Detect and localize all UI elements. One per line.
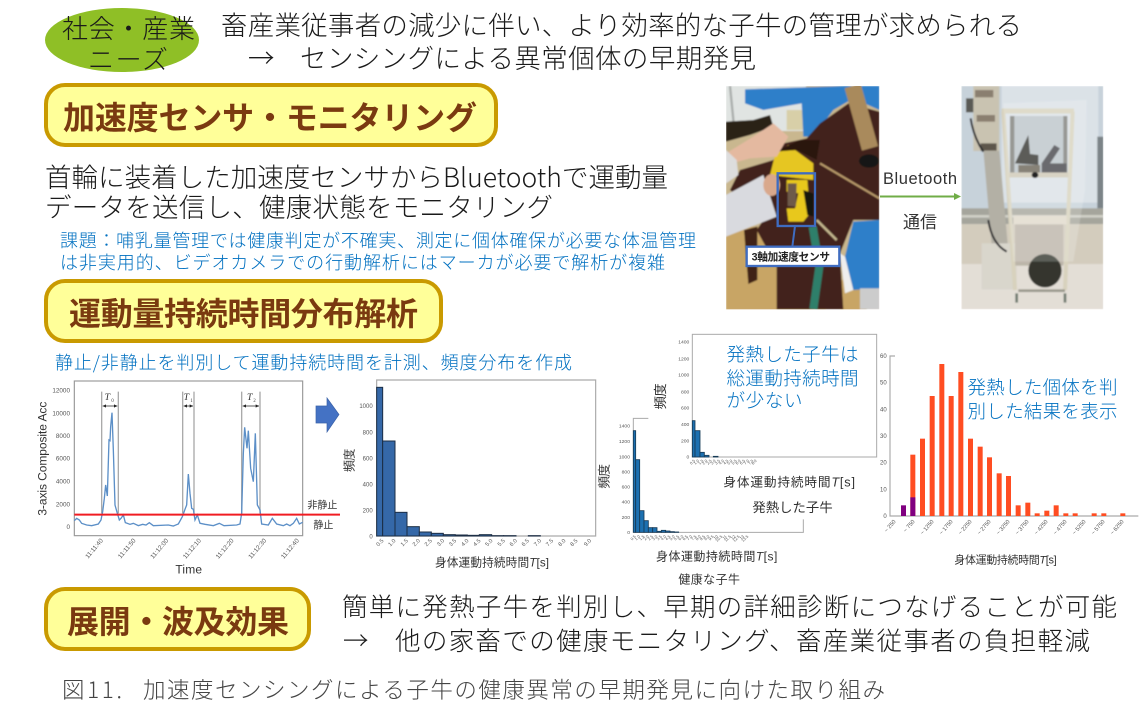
y axis ticks: 8000 [56,433,70,440]
duration markers T0 T1 T2 [102,392,260,513]
x axis ticks [84,537,301,560]
x axis ticks: ~ 250 [884,519,898,534]
y axis ticks: 200 [622,515,630,521]
x axis ticks: 5.5 [730,458,738,466]
y axis ticks: 1000 [359,404,373,410]
text block: issues [60,227,696,275]
heading: expected impact [46,589,309,649]
y axis ticks: 50 [880,381,887,387]
x axis ticks: 1.5 [697,458,705,466]
x axis ticks: 8.0 [558,538,567,548]
x axis ticks: 13.5 [740,533,750,543]
x axis ticks: 3.0 [709,458,717,466]
y axis ticks: 10 [880,487,887,493]
x axis ticks: 13 [738,533,746,541]
x axis ticks [689,458,758,466]
x axis ticks: 6.0 [677,533,685,541]
chart: feverish calf histogram [653,334,877,515]
y axis ticks: 600 [681,406,690,412]
x axis label: Time [175,563,202,577]
callout: feverish calves have low total duration [726,341,858,413]
x axis ticks: 11:12:00 [149,537,171,560]
text block: impact description [342,587,1117,658]
y axis label: 頻度 [343,449,357,472]
duration markers T0 T1 T2: 2 [253,399,256,404]
photo: receiver on stand [961,86,1103,309]
chart: discrimination result histogram [880,354,1138,567]
y axis ticks: 60 [880,354,887,360]
y axis ticks [678,340,690,461]
text block: impact description: 簡単に発熱子牛を判別し、早期の詳細診断につなげることが可能 [342,587,1117,624]
panel: social and industry needs [45,4,1022,77]
x axis label: 身体運動持続時間T[s] [656,549,777,564]
y axis ticks: 800 [622,469,630,475]
x axis ticks: 12.5 [732,533,741,543]
y axis ticks: 0 [66,524,70,531]
badge label: ニーズ [88,40,168,77]
y axis ticks: 1400 [619,424,630,430]
histogram bars [377,387,540,536]
callout: feverish calves have low total duration: が少ない [726,387,802,413]
x axis ticks: 2.5 [647,533,655,541]
text block: issues: 課題：哺乳量管理では健康判定が不確実、測定に個体確保が必要な体温管理 [60,227,696,253]
x axis label: 身体運動持続時間T[s] [723,475,855,490]
y axis ticks: 0 [687,455,690,461]
x axis ticks: 8.5 [699,533,707,541]
x axis ticks: 3.0 [436,538,446,548]
arrow: series to histogram [316,398,339,432]
y axis ticks: 0 [369,534,373,540]
connector: sensor to label [792,226,795,247]
heading: acceleration sensor monitoring: 加速度センサ・モニタリング [63,93,477,139]
threshold labels [307,498,337,532]
needs text: → [248,37,274,76]
orange bars [910,364,1125,516]
x axis ticks: 11:11:50 [117,537,138,560]
y axis ticks [619,424,630,536]
x axis ticks: 3.5 [448,538,458,548]
x axis ticks: 2.0 [412,538,422,548]
y axis ticks: 800 [363,430,373,436]
needs text [221,4,1022,76]
x axis ticks: 9.5 [707,533,715,541]
text block: issues: は非実用的、ビデオカメラでの行動解析にはマーカが必要で解析が複雑 [60,249,665,275]
x axis ticks: 6.5 [521,538,531,548]
x axis ticks [629,533,750,543]
y axis label: 頻度 [597,464,612,489]
x axis ticks: ~ 2750 [977,519,993,536]
y axis ticks: 400 [363,482,373,488]
threshold line [74,512,340,518]
heading: expected impact: 展開・波及効果 [67,597,289,643]
figure caption: 図11. [62,673,122,705]
y axis ticks: 12000 [52,387,70,394]
x axis ticks: 2.0 [642,533,650,541]
y axis ticks: 0 [883,514,887,520]
x axis ticks: 11 [721,533,728,540]
x axis ticks: 6.0 [734,458,742,466]
x axis ticks: 3.5 [714,458,722,466]
badge label [62,9,195,77]
x axis ticks: 4.5 [664,533,672,541]
x axis ticks: 8.0 [694,533,702,541]
y axis ticks [52,387,70,531]
x axis ticks: 12 [730,533,737,541]
duration markers T0 T1 T2: T [247,392,253,403]
y axis ticks: 6000 [56,456,70,463]
y axis ticks: 40 [880,407,887,413]
histogram bars [633,431,679,532]
x axis ticks: 1.5 [400,538,410,548]
x axis ticks: 10.5 [714,533,724,543]
x axis ticks: 0.5 [689,458,697,466]
y axis ticks: 20 [880,461,887,467]
x axis ticks: 6.5 [681,533,689,541]
x axis ticks: 11:12:20 [215,537,236,560]
arrow: Bluetooth communication: Bluetooth [883,170,957,188]
x axis ticks: 9.0 [703,533,711,541]
y axis ticks: 10000 [52,410,70,417]
x axis ticks: ~ 4250 [1034,519,1050,536]
y axis ticks: 4000 [56,479,70,486]
x axis ticks: 11.5 [723,533,733,543]
x axis ticks: 2.5 [705,458,713,466]
y axis ticks [880,354,887,520]
callout: sensor highlight box [778,173,815,226]
badge label: 社会・産業 [62,9,195,46]
y axis ticks: 1000 [678,373,690,379]
y axis ticks: 400 [622,500,630,506]
x axis ticks: 3.5 [655,533,663,541]
y axis label: 3-axis Composite Acc [36,402,50,516]
y axis ticks: 200 [363,508,373,514]
y axis ticks: 400 [681,422,690,428]
y axis ticks: 1200 [619,439,630,445]
photo: sensor on calf [726,86,879,310]
x axis ticks: 7.0 [743,458,751,466]
x axis ticks: 10 [712,533,720,541]
x axis ticks: 8.0 [750,458,758,466]
y axis ticks: 1400 [678,340,690,346]
threshold labels: 非静止 [307,498,337,511]
x axis ticks: 2.0 [701,458,709,466]
x axis ticks: 8.5 [570,538,579,548]
purple bars [901,497,915,516]
x axis ticks [376,538,593,548]
y axis ticks: 600 [363,456,373,462]
chart: healthy calf histogram [597,418,803,586]
y axis ticks: 1000 [619,454,630,460]
text block: monitoring description [45,156,668,225]
y axis ticks: 30 [880,434,887,440]
callout: feverish calves have low total duration: 総運動持続時間 [726,365,858,391]
x axis ticks: 5.0 [485,538,494,548]
x axis ticks: 6.0 [509,538,519,548]
x axis ticks: ~ 1250 [920,519,936,536]
text block: impact description: 他の家畜での健康モニタリング、畜産業従事者の負担軽減 [395,621,1090,658]
chart caption: healthy calf: 健康な子牛 [678,571,740,586]
arrow: Bluetooth communication: 通信 [903,213,937,232]
x axis label: 身体運動持続時間T[s] [954,553,1057,567]
x axis ticks: 4.0 [718,458,726,466]
x axis ticks: ~ 1750 [939,519,955,536]
x axis ticks: 1.0 [693,458,701,466]
x axis ticks: 4.0 [461,538,470,548]
x axis ticks: ~ 3750 [1015,519,1031,536]
x axis ticks: 11:12:40 [280,537,301,560]
y axis ticks: 2000 [56,501,70,508]
x axis ticks: 5.0 [668,533,676,541]
text block: monitoring description: データを送信し、健康状態をモニタリング [45,186,553,225]
x axis ticks: 7.0 [533,538,543,548]
x axis ticks: 5.5 [673,533,681,541]
needs text: 畜産業従事者の減少に伴い、より効率的な子牛の管理が求められる [221,4,1022,43]
y axis ticks: 1200 [678,356,690,362]
text block: analysis description: 静止/非静止を判別して運動持続時間を計測、頻度分布を作成 [55,349,572,375]
heading: duration distribution analysis [46,281,441,341]
figure caption: 加速度センシングによる子牛の健康異常の早期発見に向けた取り組み [143,673,885,705]
duration markers T0 T1 T2: 0 [111,399,114,404]
text block: impact description: → [343,621,369,658]
x axis ticks: 11:11:40 [84,537,105,560]
x axis ticks: 1.0 [388,538,397,548]
badge: needs ellipse [45,8,199,72]
x axis ticks: 11:12:10 [182,537,203,560]
x axis ticks: ~ 750 [903,519,917,534]
chart: acceleration time series [36,381,340,577]
x axis ticks: 7.0 [686,533,694,541]
y axis ticks: 600 [622,485,630,491]
x axis ticks: 7.5 [690,533,698,541]
x axis label: 身体運動持続時間T[s] [435,556,549,570]
y axis label: 頻度 [653,383,668,409]
x axis ticks: 9.0 [583,538,593,548]
x axis ticks: 11:12:30 [247,537,268,560]
duration markers T0 T1 T2: 1 [190,399,193,404]
x axis ticks: 5.0 [726,458,734,466]
callout: discrimination result: 発熱した個体を判 [968,374,1118,400]
x axis ticks: 7.5 [545,538,555,548]
x axis ticks: 4.0 [660,533,668,541]
arrow: Bluetooth communication [880,170,961,232]
x axis ticks: 6.5 [739,458,747,466]
text block: monitoring description: 首輪に装着した加速度センサからBluetoothで運動量 [45,156,668,195]
callout: discrimination result [968,374,1118,424]
x axis ticks [884,519,1126,536]
x axis ticks: ~ 5750 [1091,519,1107,536]
x axis ticks: 4.5 [473,538,482,548]
y axis ticks [359,404,373,540]
duration markers T0 T1 T2: T [184,392,190,403]
y axis ticks: 200 [681,438,690,444]
x axis ticks: 4.5 [722,458,730,466]
callout: discrimination result: 別した結果を表示 [968,398,1118,424]
heading: duration distribution analysis: 運動量持続時間分布解析 [69,289,418,335]
callout: feverish calves have low total duration: 発熱した子牛は [726,341,858,367]
y axis ticks: 800 [681,389,690,395]
callout: 3-axis accelerometer label [747,247,839,266]
x axis ticks: 5.5 [497,538,507,548]
needs text: センシングによる異常個体の早期発見 [300,37,756,76]
x axis ticks: 1.5 [638,533,646,541]
x axis ticks: ~ 3250 [996,519,1012,536]
x axis ticks: ~ 5250 [1072,519,1088,536]
x axis ticks: 1.0 [634,533,642,541]
x axis ticks: ~ 4750 [1053,519,1069,536]
x axis ticks: ~ 2250 [958,519,974,536]
x axis ticks: 2.5 [424,538,434,548]
acceleration line [74,413,303,526]
y axis ticks: 0 [627,530,630,536]
x axis ticks: 7.5 [747,458,755,466]
duration markers T0 T1 T2: T [105,392,111,403]
threshold labels: 静止 [313,519,333,532]
x axis ticks: 3.0 [651,533,659,541]
callout: 3-axis accelerometer label: 3軸加速度センサ [752,250,830,263]
x axis ticks: 0.5 [629,533,637,541]
chart caption: feverish calf: 発熱した子牛 [752,500,833,515]
histogram bars [692,421,718,457]
x axis ticks: ~ 6250 [1110,519,1126,536]
x axis ticks: 0.5 [376,538,385,548]
chart: overall duration histogram [343,380,596,570]
